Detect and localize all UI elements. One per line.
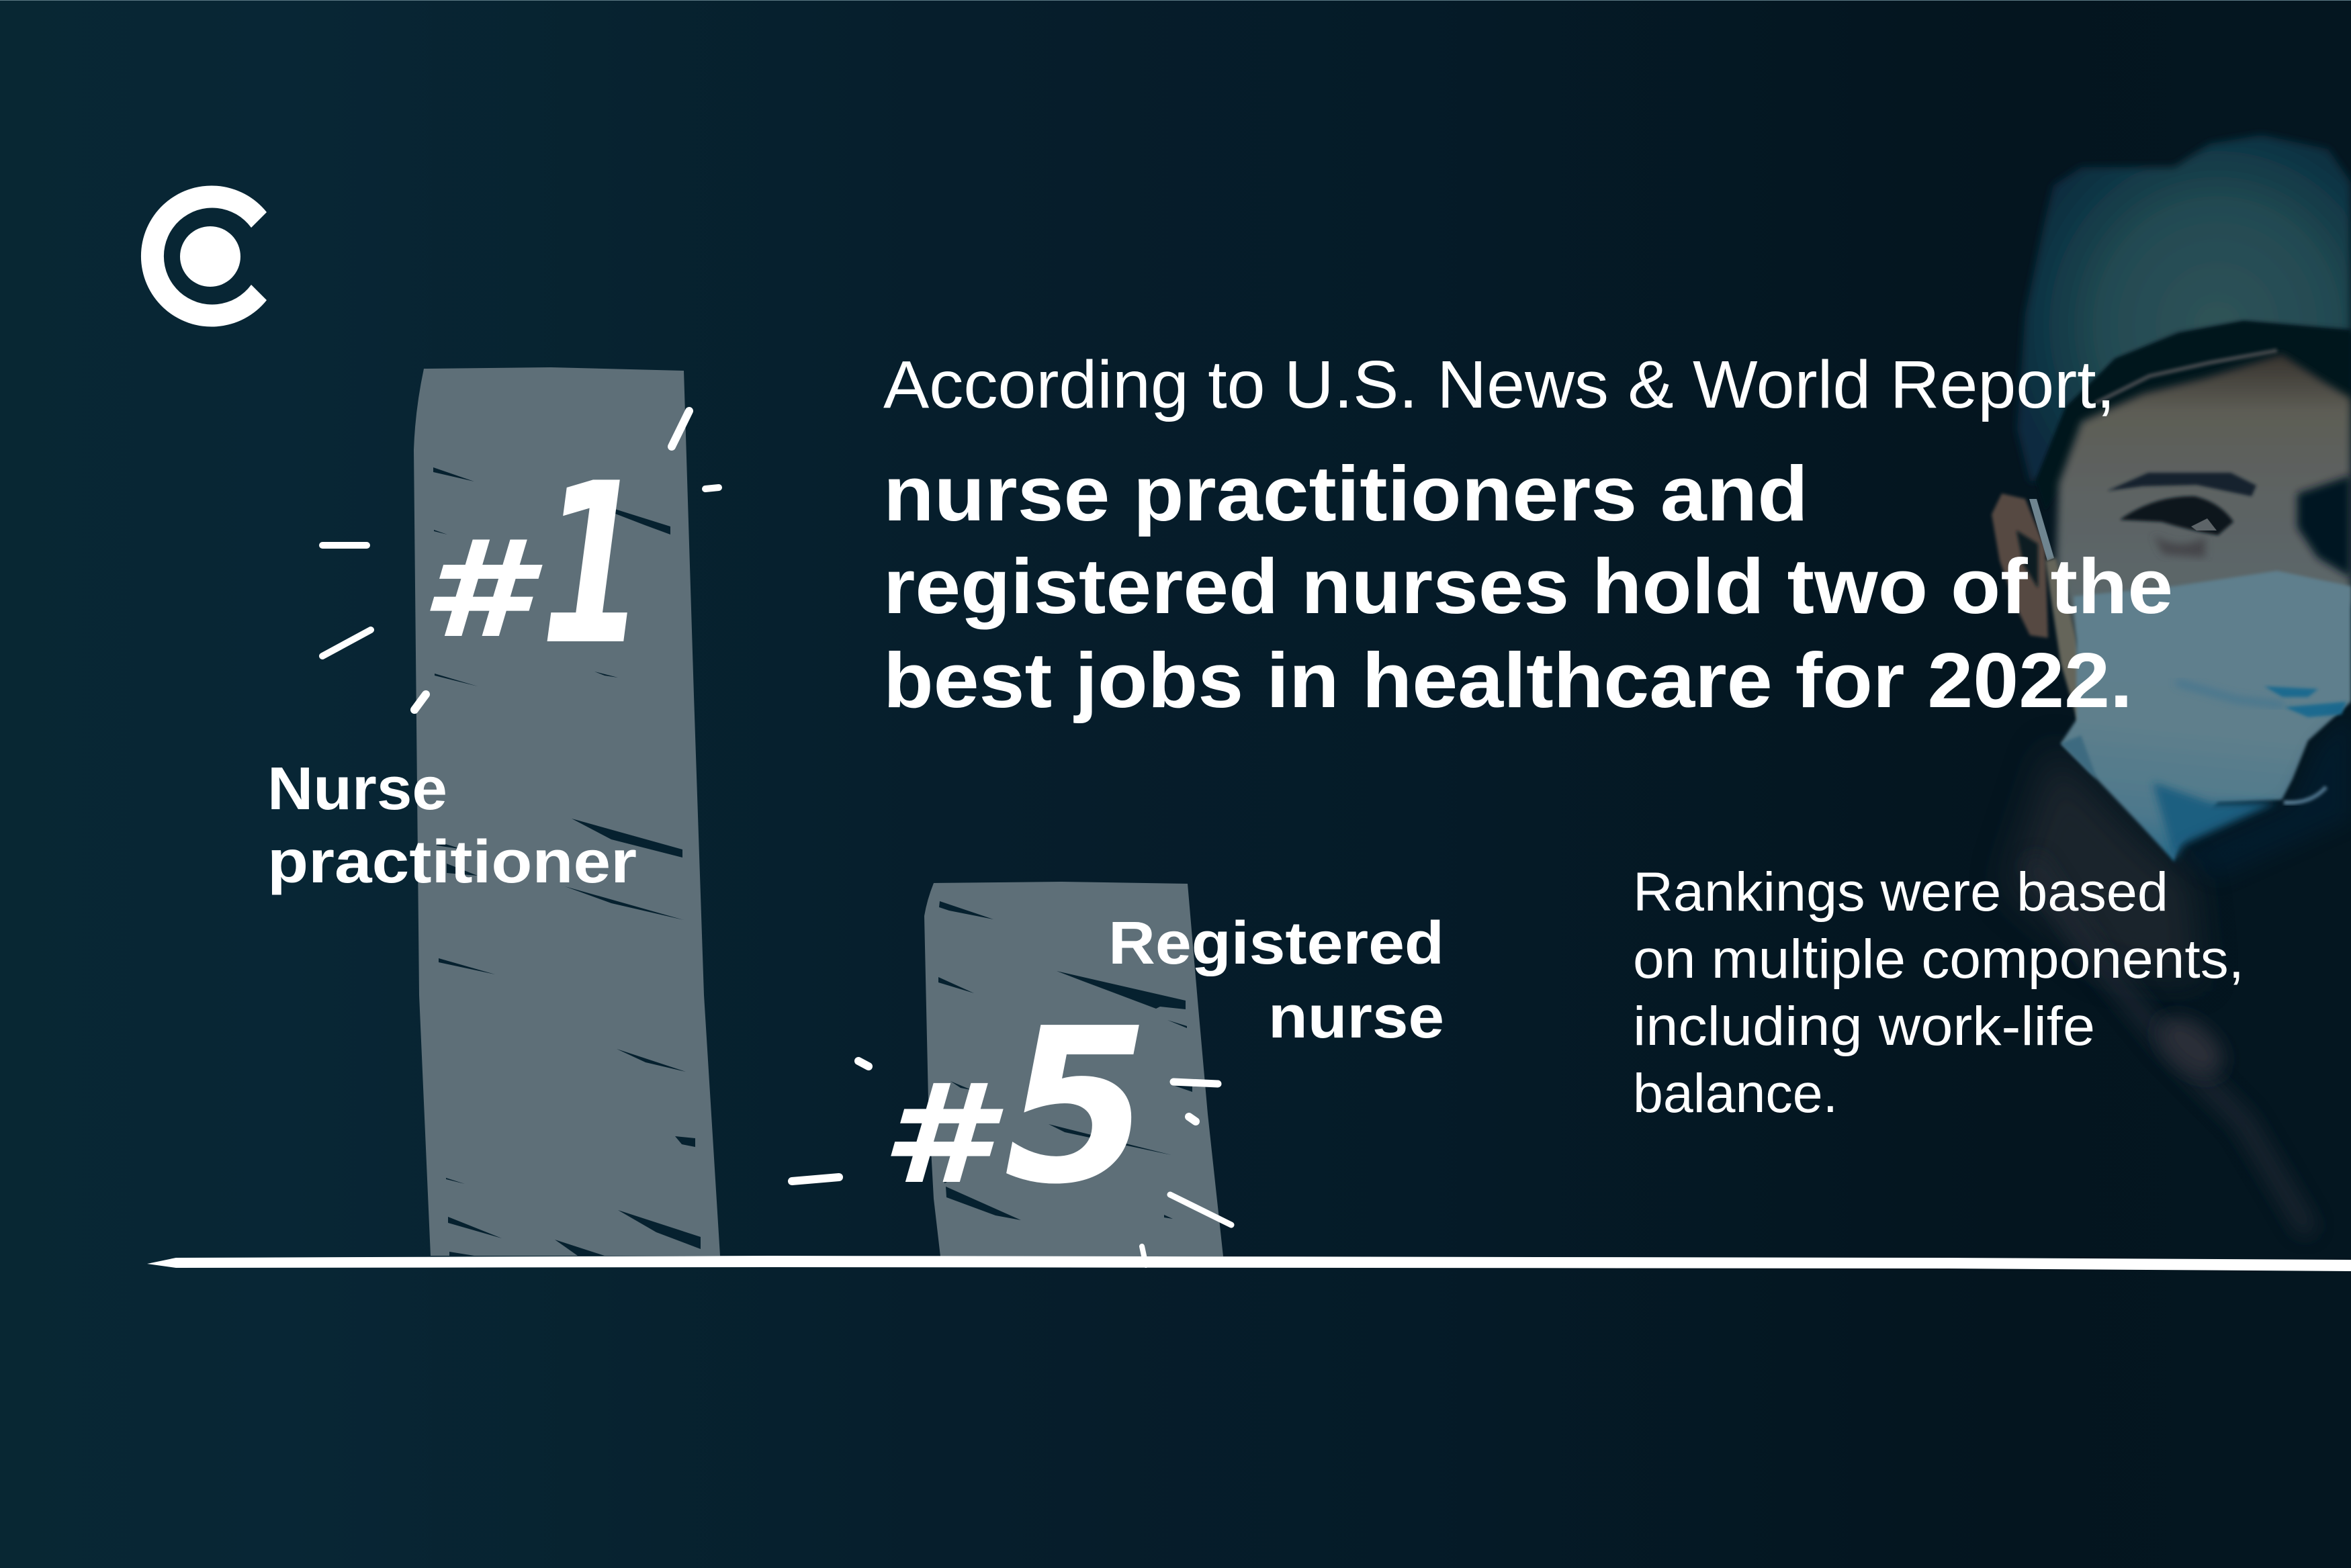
eyes and brows (2107, 473, 2351, 578)
bar hatching (938, 901, 1192, 1220)
label: registered nurse: Registered (1108, 910, 1444, 977)
ranking: #1 (420, 436, 645, 694)
headline: best jobs in healthcare for 2022. (883, 637, 2133, 724)
ranking: #5: # (881, 1055, 1004, 1215)
face skin (2056, 355, 2351, 638)
ear loop strap (2029, 499, 2089, 725)
accent ticks around #5 (792, 1061, 1231, 1265)
headline (883, 450, 2173, 724)
ranking: #1: # (420, 512, 543, 668)
rankings note (1633, 862, 2244, 1124)
label: registered nurse (1108, 910, 1444, 1051)
scrubs and neck (2005, 745, 2305, 1226)
intro line: According to U.S. News & World Report, (883, 347, 2115, 422)
rankings note: on multiple components, (1633, 929, 2244, 990)
rankings note: balance. (1633, 1063, 1838, 1124)
shadow under mask (2179, 712, 2351, 880)
rankings note: including work-life (1633, 996, 2095, 1057)
rankings note: Rankings were based (1633, 862, 2168, 923)
bar hatching (433, 467, 701, 1256)
logo (141, 186, 267, 327)
surgical cap (2017, 135, 2351, 481)
label: nurse practitioner: practitioner (267, 829, 637, 896)
bar: #5 registered nurse (924, 882, 1223, 1256)
ear (1992, 494, 2048, 638)
label: registered nurse: nurse (1268, 984, 1444, 1051)
label: nurse practitioner (267, 755, 637, 896)
ranking: #1: 1 (541, 436, 645, 694)
headline: nurse practitioners and (883, 450, 1808, 537)
ground line (147, 1256, 2351, 1271)
accent ticks around #1 (322, 411, 719, 710)
face mask (2061, 571, 2351, 862)
hair (2035, 321, 2351, 510)
label: nurse practitioner: Nurse (267, 755, 447, 823)
ranking: #5: 5 (1004, 982, 1150, 1231)
photo: masked nurse (1992, 135, 2351, 1226)
bar: #1 nurse practitioner (414, 367, 720, 1256)
ranking: #5 (881, 982, 1150, 1231)
headline: registered nurses hold two of the (883, 543, 2173, 630)
